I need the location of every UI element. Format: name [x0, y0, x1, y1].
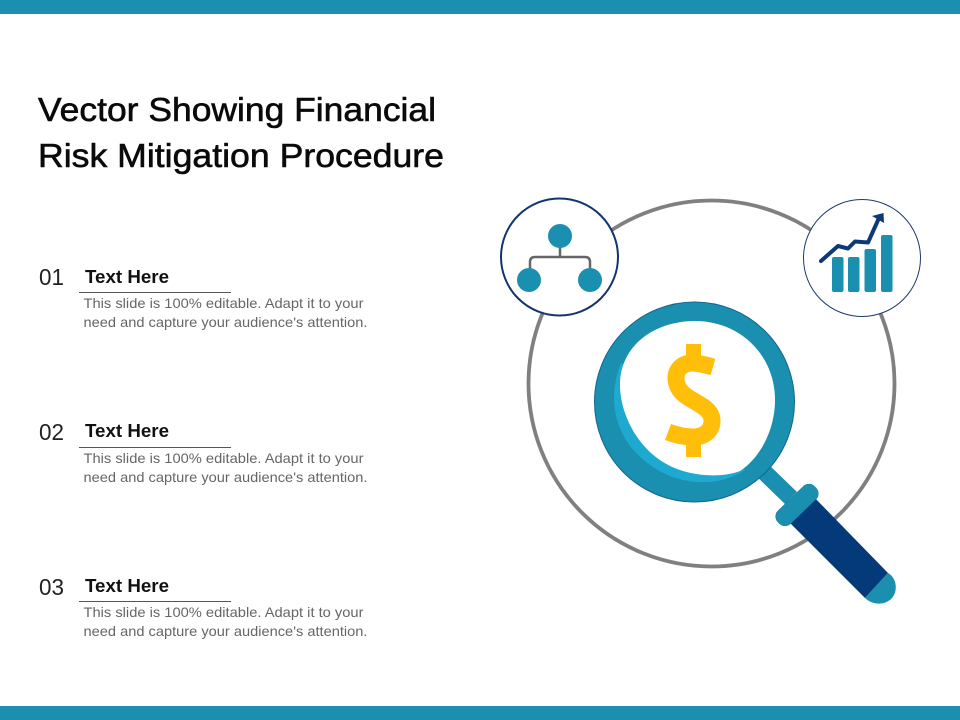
grip end cap	[865, 573, 896, 604]
item 02	[39, 419, 368, 485]
title: Risk Mitigation Procedure	[38, 138, 444, 175]
body 01: This slide is 100% editable. Adapt it to your	[84, 295, 364, 311]
handle neck	[753, 461, 797, 504]
body 03: This slide is 100% editable. Adapt it to your	[84, 604, 364, 620]
lens inner shade	[614, 363, 745, 482]
body 02	[84, 450, 368, 485]
body 01: need and capture your audience's attention.	[84, 314, 368, 330]
navy grip	[785, 493, 888, 598]
number 03: 03	[39, 574, 64, 600]
body 01	[84, 295, 368, 330]
body 02: need and capture your audience's attention.	[84, 469, 368, 485]
item 01	[39, 264, 368, 330]
top bar	[0, 0, 960, 14]
title	[38, 92, 444, 175]
heading 01: Text Here	[85, 267, 169, 287]
icon: magnifying glass	[594, 302, 896, 604]
icon: growth chart	[804, 200, 920, 316]
large grey ring	[528, 200, 894, 566]
body 02: This slide is 100% editable. Adapt it to your	[84, 450, 364, 466]
lens rim	[594, 302, 794, 502]
body 03	[84, 604, 368, 639]
number 01: 01	[39, 264, 64, 290]
body 03: need and capture your audience's attention.	[84, 623, 368, 639]
heading 03: Text Here	[85, 576, 169, 596]
number 02: 02	[39, 419, 64, 445]
icon: hierarchy	[501, 198, 618, 316]
collar	[772, 481, 822, 529]
item 03	[39, 574, 368, 639]
dollar sign	[668, 344, 713, 457]
heading 02: Text Here	[85, 421, 169, 441]
title: Vector Showing Financial	[38, 92, 436, 129]
bottom bar	[0, 706, 960, 720]
lens glass	[620, 321, 775, 475]
